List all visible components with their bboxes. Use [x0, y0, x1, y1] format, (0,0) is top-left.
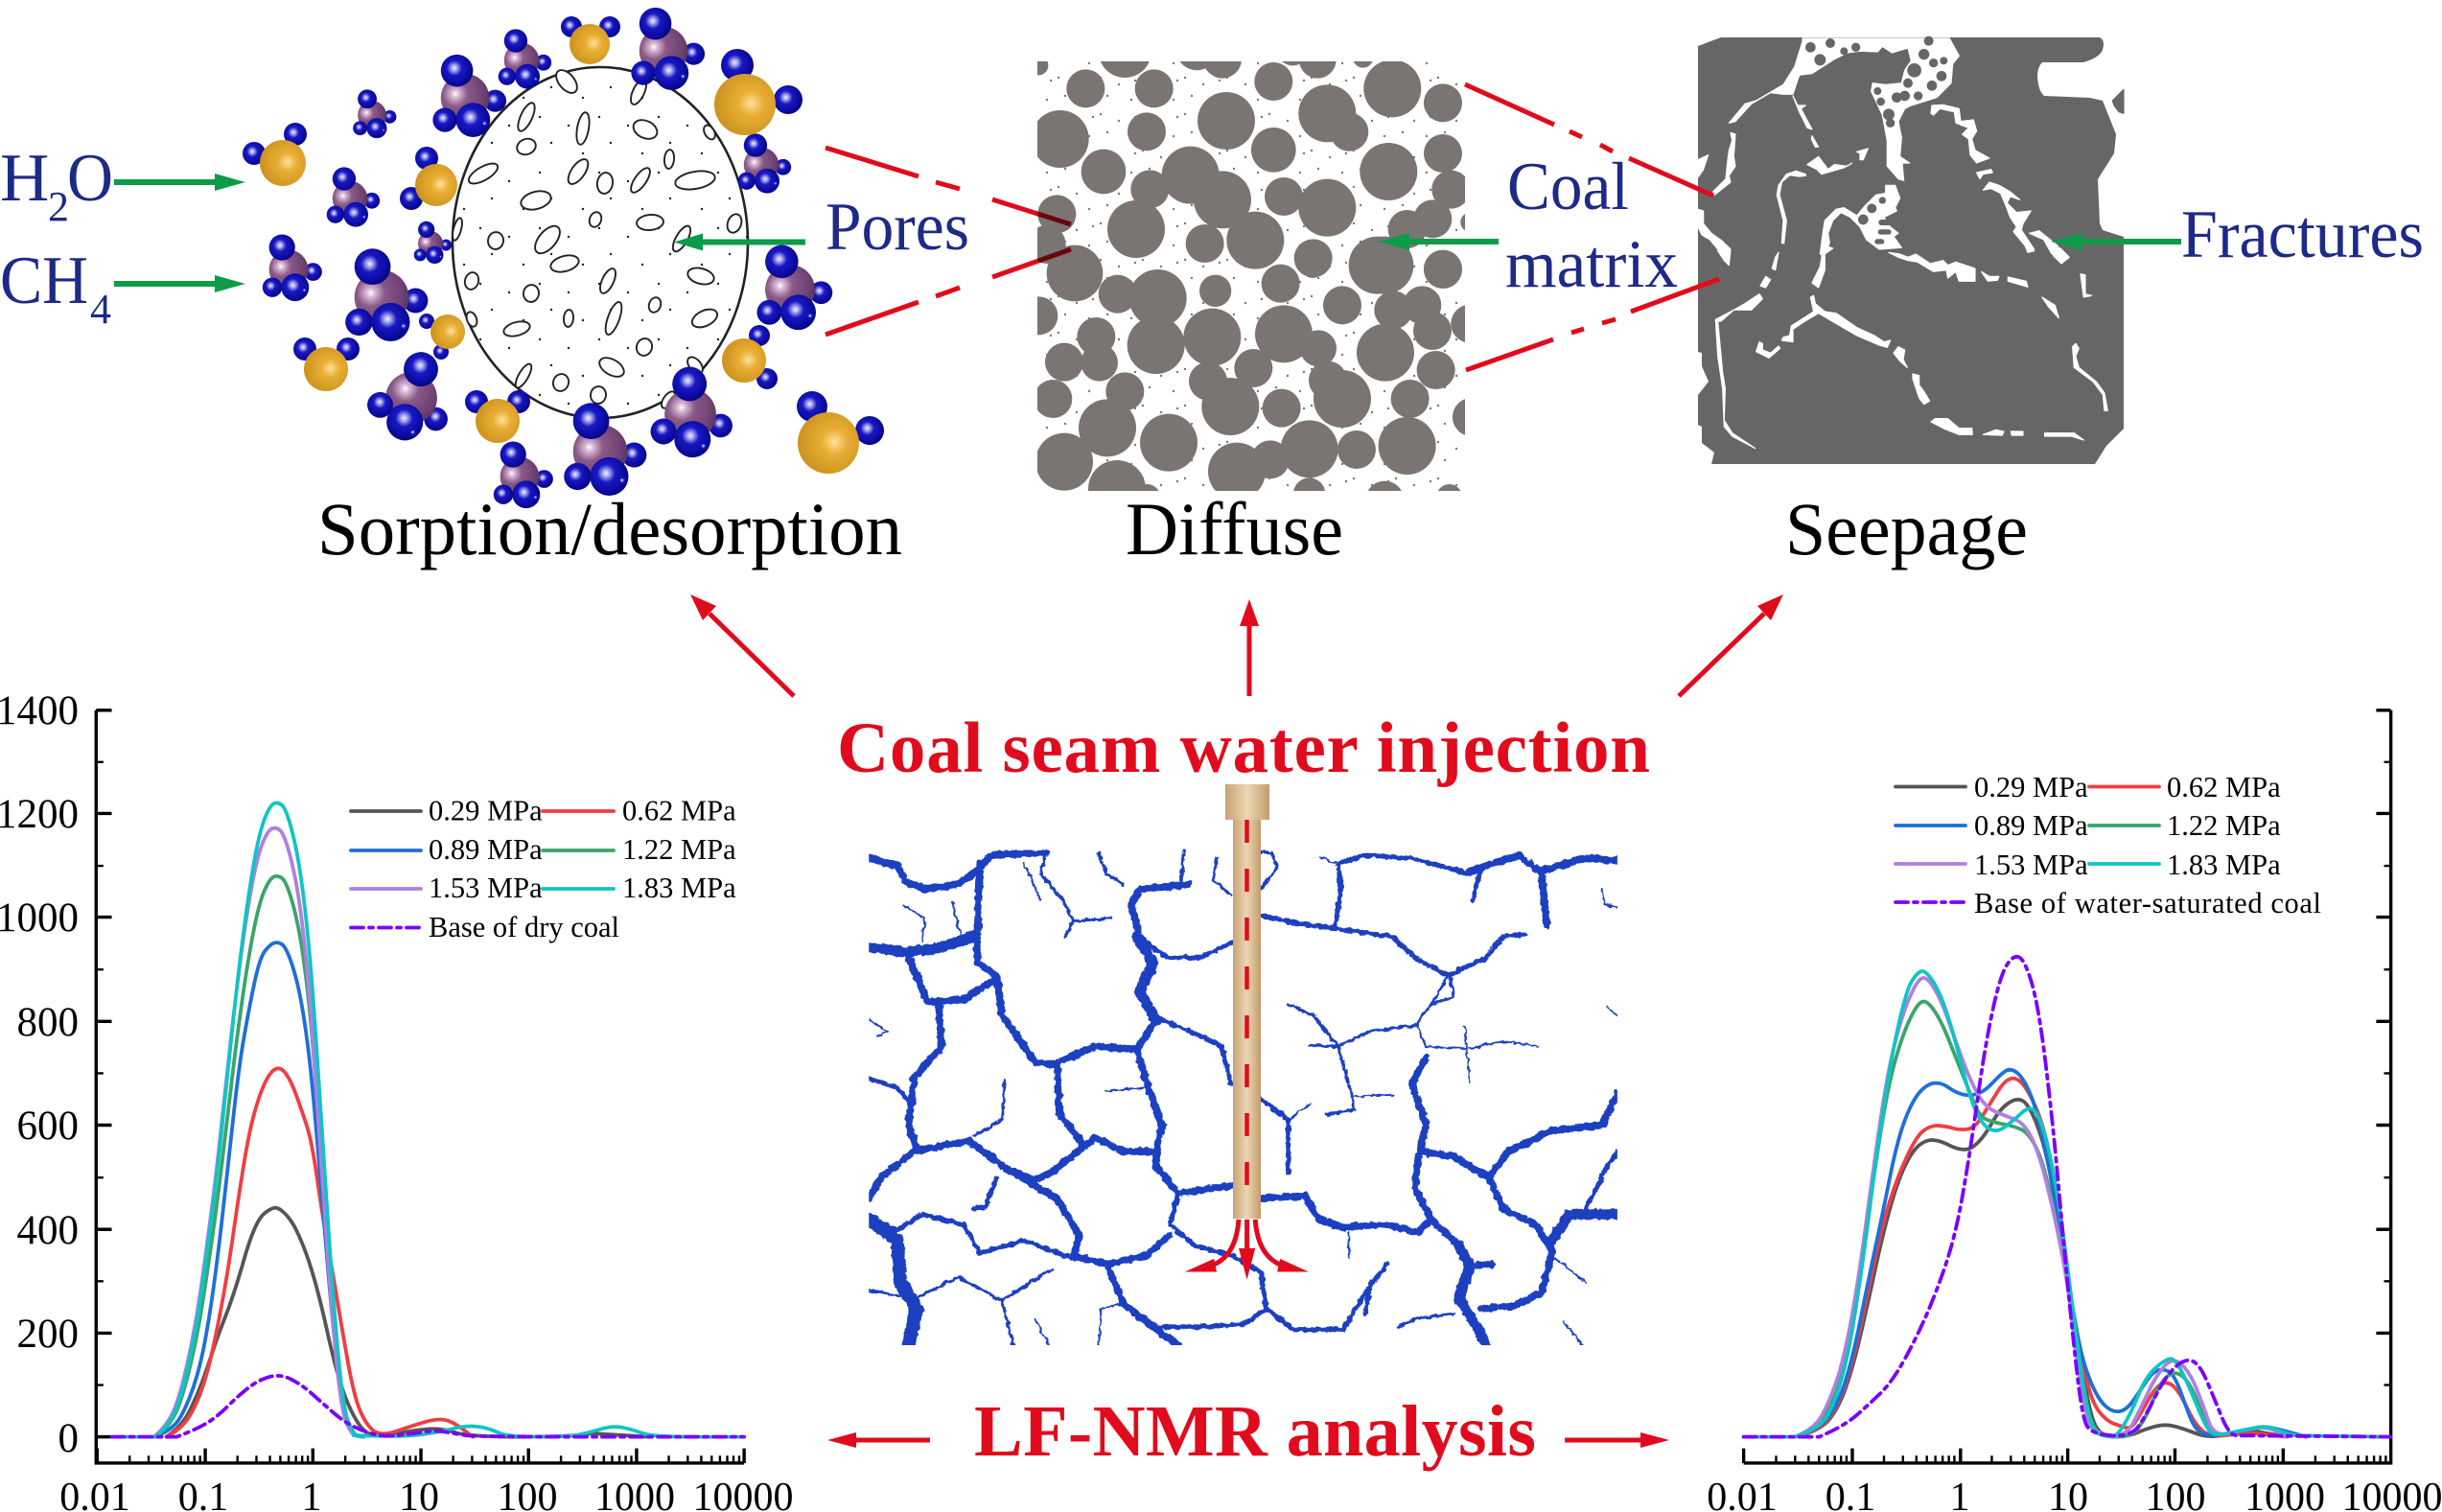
chart: dry coal NMR curves [0, 688, 794, 1512]
connector: pores to diffuse [826, 148, 1071, 335]
legend: 0.62 MPa [622, 794, 736, 826]
y axis labels: 200 [17, 1312, 79, 1357]
label: CH4: 4 [90, 286, 111, 333]
label: Coal matrix: matrix [1505, 227, 1678, 302]
methane molecules [263, 8, 832, 508]
y axis labels [0, 688, 79, 1461]
arrow: coal matrix [1378, 233, 1499, 250]
label: Fractures: Fractures [2181, 198, 2424, 272]
fractures upper half [1698, 36, 2124, 254]
label: H2O: O [67, 141, 113, 216]
legend: 0.29 MPa [429, 794, 543, 826]
arrow: pores [674, 234, 805, 251]
legend: 0.29 MPa [1974, 771, 2088, 803]
legend: 1.22 MPa [622, 833, 736, 866]
label: Coal matrix [1505, 150, 1678, 302]
curves [1744, 957, 2391, 1437]
panel: sorption/desorption particle [243, 8, 884, 508]
arrow: CH4 to molecule [114, 275, 245, 292]
legend: 1.22 MPa [2167, 809, 2281, 842]
curves [112, 803, 744, 1437]
coal particle with pores [451, 66, 748, 418]
arrow: H2O to molecule [114, 174, 245, 191]
y axis labels: 800 [17, 1000, 79, 1045]
label: H2O [0, 141, 113, 230]
legend: 0.89 MPa [1974, 809, 2088, 842]
legend [1895, 771, 2321, 919]
fractures lower half [1715, 244, 2107, 449]
arrow: injection to sorption [690, 594, 794, 696]
icon: water outflow arrows [1185, 1220, 1309, 1280]
legend: 0.62 MPa [2167, 771, 2281, 803]
coal block [1698, 37, 2124, 464]
heading: Diffuse: Diffuse [1126, 487, 1343, 570]
arrow: injection to seepage [1679, 594, 1783, 696]
axes [1744, 710, 2391, 1463]
heading: Seepage: Seepage [1785, 487, 2028, 570]
label: Coal matrix: Coal [1507, 150, 1629, 224]
connector: diffuse to seepage [1465, 84, 1719, 370]
legend: 1.53 MPa [1974, 849, 2088, 881]
legend: 1.53 MPa [429, 872, 543, 904]
legend: 0.89 MPa [429, 833, 543, 866]
legend: 1.83 MPa [2167, 849, 2281, 881]
title: LF-NMR analysis: LF-NMR analysis [974, 1391, 1536, 1472]
x axis labels [59, 1476, 794, 1512]
y axis labels: 600 [17, 1104, 79, 1149]
water molecules [243, 16, 884, 474]
legend [351, 794, 736, 943]
legend: Base of water-saturated coal [1974, 887, 2321, 919]
arrow: injection to diffuse [1240, 599, 1259, 696]
heading: Sorption/desorption: Sorption/desorption [317, 487, 902, 570]
y axis labels: 0 [58, 1416, 79, 1461]
y axis labels: 400 [17, 1208, 79, 1253]
label: Pores: Pores [826, 190, 969, 265]
arrow: to left chart [827, 1432, 930, 1448]
icon: injection pipe [1225, 784, 1269, 1219]
panel: diffuse coal matrix [1037, 61, 1465, 491]
arrow: fractures [2051, 233, 2181, 250]
title: Coal seam water injection: Coal seam water injection [837, 709, 1650, 788]
label: CH4: CH [0, 244, 88, 318]
label: H2O: 2 [48, 183, 69, 230]
arrow: to right chart [1565, 1432, 1669, 1448]
legend: 1.83 MPa [622, 872, 736, 904]
panel: crack network [869, 850, 1617, 1345]
chart: water-saturated coal NMR curves [1707, 710, 2442, 1512]
legend: Base of dry coal [429, 911, 619, 943]
axes [96, 710, 744, 1463]
label: H2O: H [0, 141, 49, 216]
x axis labels [1707, 1476, 2442, 1512]
panel: seepage fractured coal [1698, 36, 2124, 464]
